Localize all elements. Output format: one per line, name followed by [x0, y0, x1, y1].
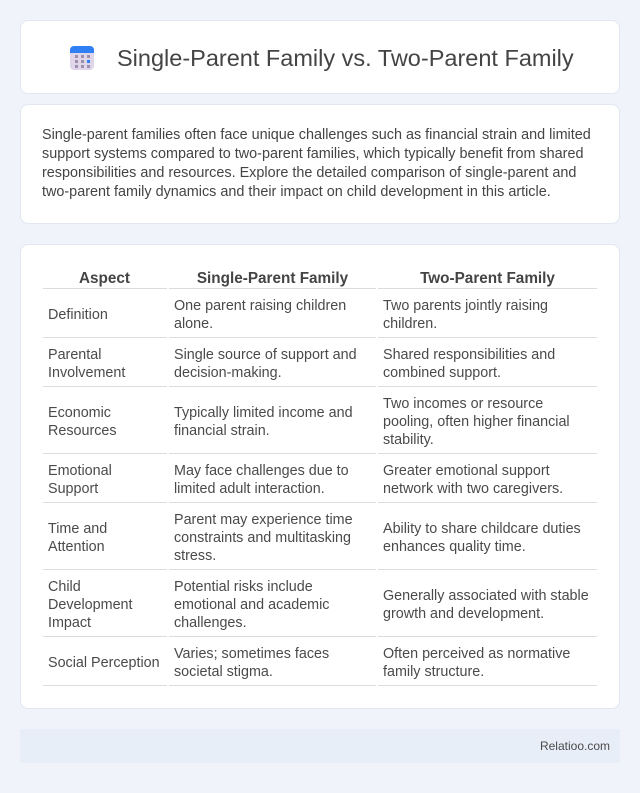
row: economic resources: Two incomes or resource	[383, 396, 543, 412]
intro text: support systems compared to two-parent families, which typically benefit from shared	[42, 146, 583, 162]
row: social perception: societal stigma.	[174, 664, 273, 680]
row: time and attention	[43, 512, 597, 570]
table header: Single-Parent Family	[197, 270, 348, 287]
row: economic resources: Typically limited income and	[174, 405, 353, 421]
row: child development impact: Child	[48, 579, 81, 595]
row: parental involvement: Parental	[48, 347, 101, 363]
row: time and attention: Ability to share childcare duties	[383, 521, 581, 537]
row: time and attention: stress.	[174, 548, 216, 564]
row: parental involvement: Involvement	[48, 365, 125, 381]
row: definition: alone.	[174, 316, 213, 332]
row: emotional support	[43, 463, 597, 503]
table card	[20, 244, 620, 709]
table header: Aspect	[79, 270, 130, 287]
row: time and attention: constraints and multitasking	[174, 530, 351, 546]
row: emotional support: Support	[48, 481, 98, 497]
row: social perception: Often perceived as normative	[383, 646, 570, 662]
row: time and attention: Parent may experience time	[174, 512, 353, 528]
row: child development impact: Development	[48, 597, 133, 613]
row: child development impact: growth and development.	[383, 606, 544, 622]
row: social perception	[43, 646, 597, 686]
row: child development impact: challenges.	[174, 615, 247, 631]
row: emotional support: network with two caregivers.	[383, 481, 563, 497]
row: child development impact	[43, 579, 597, 637]
row: social perception: family structure.	[383, 664, 484, 680]
row: child development impact: Impact	[48, 615, 91, 631]
row: child development impact: Generally associated with stable	[383, 588, 589, 604]
row: time and attention: enhances quality time.	[383, 539, 526, 555]
row: parental involvement: Shared responsibilities and	[383, 347, 555, 363]
intro text: responsibilities and resources. Explore the detailed comparison of single-parent and	[42, 165, 576, 181]
row: emotional support: May face challenges due to	[174, 463, 349, 479]
row: definition: Two parents jointly raising	[383, 298, 548, 314]
header card	[20, 20, 620, 94]
row: time and attention: Attention	[48, 539, 105, 555]
row: parental involvement: Single source of support and	[174, 347, 357, 363]
table header	[43, 270, 597, 289]
row: economic resources	[43, 396, 597, 454]
row: definition: children.	[383, 316, 437, 332]
intro text: Single-parent families often face unique challenges such as financial strain and limited	[42, 127, 591, 143]
footer bar	[20, 729, 620, 763]
table header: Two-Parent Family	[420, 270, 555, 287]
row: economic resources: Economic	[48, 405, 111, 421]
row: emotional support: limited adult interaction.	[174, 481, 325, 497]
intro text	[42, 127, 591, 200]
row: child development impact: Potential risks include	[174, 579, 313, 595]
intro card	[20, 104, 620, 224]
intro text: two-parent family dynamics and their impact on child development in this article.	[42, 184, 551, 200]
row: economic resources: pooling, often higher financial	[383, 414, 570, 430]
row: parental involvement	[43, 347, 597, 387]
row: definition: Definition	[48, 307, 108, 323]
icon: calendar	[70, 46, 94, 70]
row: economic resources: financial strain.	[174, 423, 270, 439]
row: emotional support: Greater emotional support	[383, 463, 550, 479]
row: child development impact: emotional and academic	[174, 597, 329, 613]
row: parental involvement: combined support.	[383, 365, 501, 381]
row: definition	[43, 298, 597, 338]
row: definition: One parent raising children	[174, 298, 346, 314]
row: parental involvement: decision-making.	[174, 365, 282, 381]
row: time and attention: Time and	[48, 521, 107, 537]
row: social perception: Varies; sometimes faces	[174, 646, 329, 662]
row: social perception: Social Perception	[48, 655, 160, 671]
row: economic resources: Resources	[48, 423, 117, 439]
row: economic resources: stability.	[383, 432, 434, 448]
row: emotional support: Emotional	[48, 463, 112, 479]
title: Single-Parent Family vs. Two-Parent Family	[117, 45, 574, 71]
footer credit: Relatioo.com	[540, 739, 610, 753]
